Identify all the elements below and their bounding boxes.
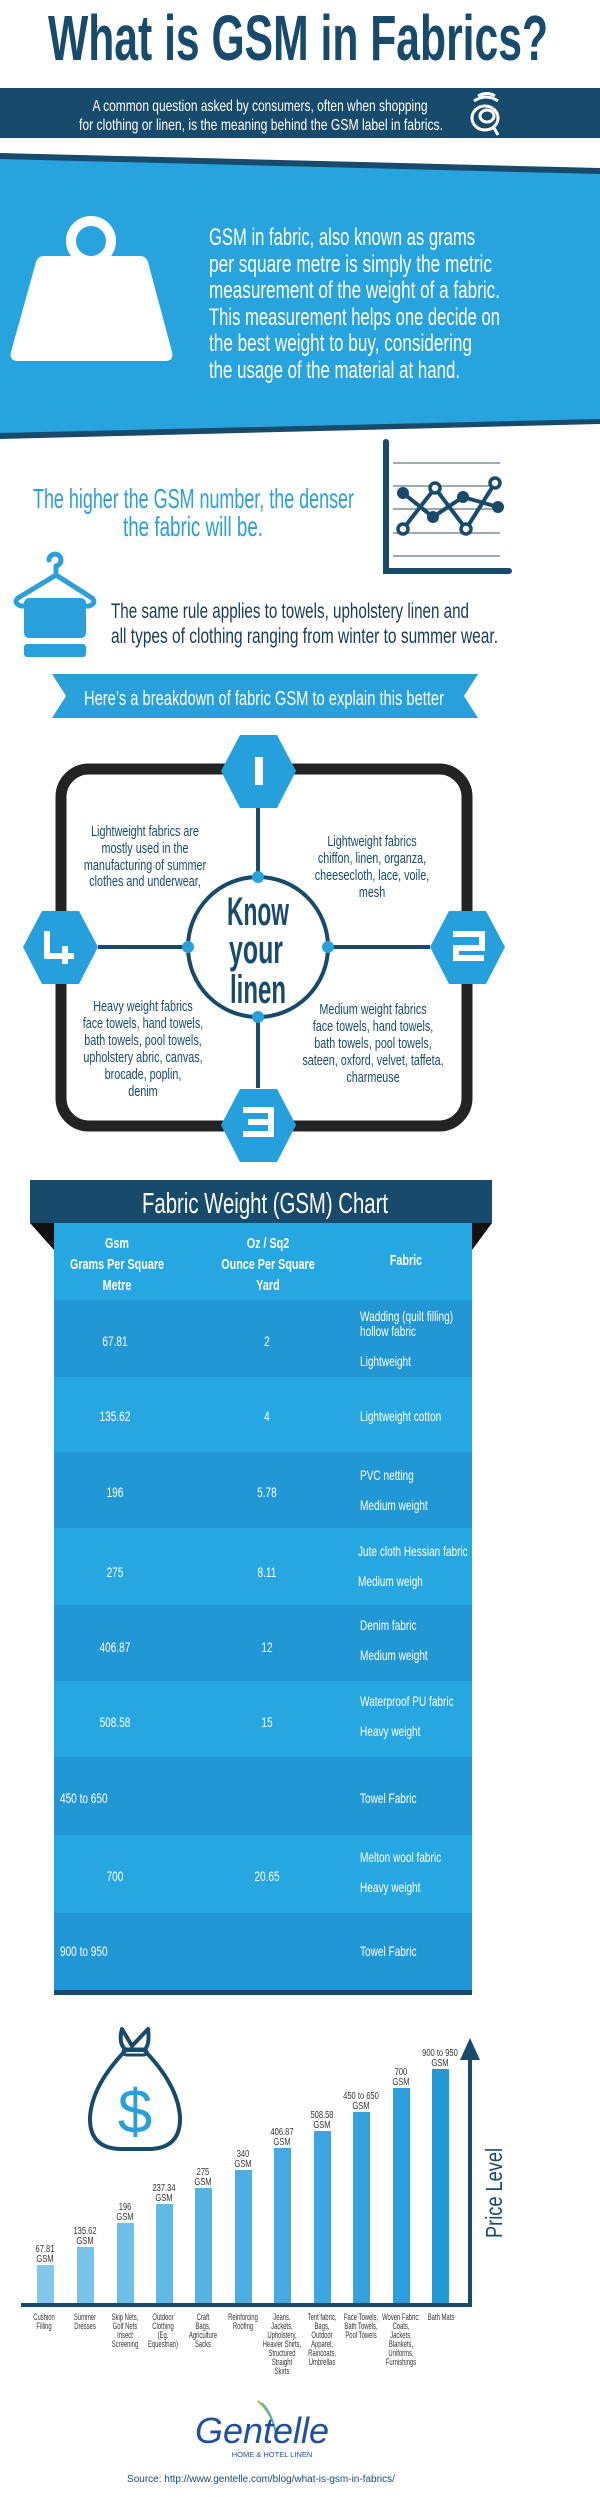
category labels: Roofing — [233, 2321, 253, 2331]
table rows: PVC netting — [360, 1467, 414, 1483]
category labels: Filling — [36, 2321, 52, 2331]
text: block 1 — [84, 822, 207, 889]
bar value labels: GSM — [76, 2235, 94, 2246]
text: block 3: Medium weight fabrics — [319, 1000, 427, 1017]
category labels: Blankets, — [389, 2339, 413, 2349]
intro band: for clothing or linen, is the meaning behind the GSM label in fabrics. — [79, 117, 443, 134]
category labels: Tent fabric, — [308, 2312, 336, 2322]
source: Source: http://www.gentelle.com/blog/what-is-gsm-in-fabrics/ — [127, 2474, 395, 2485]
center text — [227, 890, 290, 1012]
table rows: 508.58 — [100, 1714, 131, 1730]
category labels: Clothing — [152, 2321, 174, 2331]
text: block 3: sateen, oxford, velvet, taffeta, — [302, 1051, 444, 1068]
category labels: Reinforcing — [228, 2312, 258, 2322]
icon: speech swirl — [472, 94, 498, 135]
table rows: 2 — [264, 1333, 270, 1349]
panel: definition — [0, 153, 600, 439]
definition text: the usage of the material at hand. — [209, 357, 460, 384]
category labels: Raincoats, — [308, 2348, 336, 2358]
category labels: Jackets, — [271, 2321, 293, 2331]
bar value labels: 67.81 — [36, 2243, 54, 2254]
table rows: 4 — [264, 1408, 270, 1424]
category labels: Dresses — [74, 2321, 96, 2331]
table rows: Wadding (quilt filling) — [360, 1308, 453, 1324]
category labels: Bags, — [195, 2321, 211, 2331]
text: block 1: manufacturing of summer — [84, 856, 207, 873]
category labels: Jackets, — [390, 2330, 412, 2340]
table rows: Medium weight — [360, 1497, 428, 1513]
bar value labels: 900 to 950 — [422, 2047, 458, 2058]
category labels: Skirts — [275, 2366, 289, 2376]
table rows: 12 — [261, 1639, 273, 1655]
text: block 2: mesh — [359, 883, 385, 900]
bar value labels: 450 to 650 — [343, 2090, 379, 2101]
definition text: the best weight to buy, considering — [209, 330, 472, 357]
text: block 4: denim — [128, 1082, 158, 1099]
heading: denser: the fabric will be. — [123, 511, 263, 542]
bar value labels: 135.62 — [73, 2225, 97, 2236]
table rows: 700 — [107, 1868, 124, 1884]
bar value labels: GSM — [273, 2136, 291, 2147]
bar value labels: 406.87 — [270, 2126, 294, 2137]
table rows: Denim fabric — [360, 1617, 417, 1633]
bar value labels: GSM — [352, 2100, 370, 2111]
category labels: Cushion — [33, 2312, 55, 2322]
table title — [30, 1180, 492, 1223]
category labels — [33, 2312, 454, 2376]
text: block 4 — [83, 997, 203, 1099]
intro band: A common question asked by consumers, often when shopping — [92, 98, 428, 115]
bar value labels: GSM — [392, 2076, 410, 2087]
category labels: Furnishings — [386, 2357, 416, 2367]
table rows: Towel Fabric — [360, 1790, 417, 1806]
table header: Grams Per Square — [70, 1255, 164, 1272]
category labels: Golf Nets — [113, 2321, 137, 2331]
table header: Metre — [103, 1276, 131, 1293]
definition text — [209, 224, 500, 384]
text: block 2: cheesecloth, lace, voile, — [315, 866, 429, 883]
diagram: know your linen — [23, 735, 505, 1162]
bar value labels: GSM — [155, 2192, 173, 2203]
category labels: Woven Fabric: — [382, 2312, 420, 2322]
bar value labels: 340 — [237, 2148, 249, 2159]
category labels: Umbrellas — [309, 2357, 335, 2367]
bar value labels: GSM — [431, 2057, 449, 2068]
category labels: Bath Mats — [428, 2312, 454, 2322]
table header: Yard — [256, 1276, 280, 1293]
category labels: Equestrian) — [148, 2339, 178, 2349]
table rows: 450 to 650 — [60, 1790, 108, 1806]
text: block 4: upholstery abric, canvas, — [83, 1048, 203, 1065]
table: fabric weight chart — [30, 1180, 492, 1995]
category labels: Outdoor — [311, 2330, 333, 2340]
bar value labels: 196 — [119, 2201, 131, 2212]
icon: money bag: $ — [118, 2078, 152, 2147]
table rows: 275 — [107, 1564, 124, 1580]
text: block 1: mostly used in the — [102, 839, 188, 856]
category labels: Straight — [272, 2357, 293, 2367]
bar value labels: 700 — [395, 2066, 407, 2077]
ribbon banner: Here’s a breakdown of fabric GSM to explain this better — [84, 688, 444, 710]
table rows: Jute cloth Hessian fabric — [358, 1543, 468, 1559]
hex 3 — [221, 1089, 296, 1162]
category labels: Face Towels, — [344, 2312, 378, 2322]
table title: Fabric Weight (GSM) Chart — [142, 1188, 388, 1220]
table header: Ounce Per Square — [221, 1255, 315, 1272]
icon: line chart — [386, 442, 509, 571]
table rows: 5.78 — [257, 1484, 277, 1500]
heading: denser — [33, 483, 354, 542]
table header: Gsm — [105, 1234, 129, 1251]
table rows: Heavy weight — [360, 1723, 421, 1739]
text: block 3: face towels, hand towels, — [313, 1017, 433, 1034]
hex 2 — [430, 911, 505, 984]
text: block 1: Lightweight fabrics are — [91, 822, 199, 839]
bar value labels: 508.58 — [310, 2109, 334, 2120]
table rows: 406.87 — [100, 1639, 131, 1655]
text: block 4: Heavy weight fabrics — [93, 997, 193, 1014]
category labels: (Eg. — [158, 2330, 168, 2340]
table rows — [60, 1308, 468, 1959]
logo: gentelle: Gentelle — [195, 2410, 329, 2451]
table rows: hollow fabric — [360, 1323, 416, 1339]
center text: your — [229, 928, 283, 972]
text: block 2: Lightweight fabrics — [327, 832, 417, 849]
table rows: 8.11 — [258, 1564, 277, 1580]
ribbon banner — [52, 674, 478, 718]
text: block 4: face towels, hand towels, — [83, 1014, 203, 1031]
hex 1 — [221, 735, 296, 808]
table rows: 15 — [261, 1714, 273, 1730]
category labels: Apparel, — [311, 2339, 333, 2349]
table rows: 900 to 950 — [60, 1943, 108, 1959]
category labels: Skip Nets, — [112, 2312, 138, 2322]
text: block 3: charmeuse — [346, 1068, 400, 1085]
bar value labels: GSM — [194, 2176, 212, 2187]
table rows: 196 — [107, 1484, 124, 1500]
text: block 4: bath towels, pool towels, — [84, 1031, 202, 1048]
category labels: Structured — [268, 2348, 296, 2358]
bar chart: price level: Price Level — [481, 2148, 507, 2238]
table rows: Towel Fabric — [360, 1943, 417, 1959]
bar value labels: GSM — [313, 2119, 331, 2130]
table rows: Waterproof PU fabric — [360, 1693, 454, 1709]
category labels: Jeans, — [273, 2312, 291, 2322]
table rows: Melton wool fabric — [360, 1849, 441, 1865]
category labels: Bags, — [315, 2321, 330, 2331]
table header — [70, 1234, 422, 1293]
heading: denser: The higher the GSM number, the denser — [33, 483, 354, 514]
category labels: Summer — [74, 2312, 96, 2322]
table rows: 20.65 — [254, 1868, 280, 1884]
category labels: Agriculture — [189, 2330, 217, 2340]
text: same rule — [111, 600, 498, 648]
hex 4 — [23, 911, 98, 984]
bar value labels: GSM — [234, 2158, 252, 2169]
table header: Fabric — [390, 1251, 422, 1268]
bar value labels: 275 — [197, 2166, 209, 2177]
text: block 2: chiffon, linen, organza, — [318, 849, 426, 866]
bar chart: price level — [21, 2038, 507, 2376]
category labels: Sacks — [195, 2339, 211, 2349]
bar value labels: 237.34 — [152, 2182, 176, 2193]
table rows: Medium weigh — [358, 1573, 423, 1589]
category labels: Screening — [112, 2339, 138, 2349]
table rows: Medium weight — [360, 1647, 428, 1663]
category labels: Craft — [197, 2312, 210, 2322]
text: block 4: brocade, poplin, — [105, 1065, 181, 1082]
intro band — [0, 88, 600, 138]
table rows: 135.62 — [100, 1408, 131, 1424]
category labels: Insect — [117, 2330, 133, 2340]
category labels: Coats, — [393, 2321, 410, 2331]
icon: money bag — [90, 2029, 180, 2149]
definition text: GSM in fabric, also known as grams — [209, 224, 475, 251]
icon: weight — [11, 221, 172, 361]
logo: gentelle: HOME & HOTEL LINEN — [232, 2450, 312, 2459]
bar value labels: GSM — [116, 2211, 134, 2222]
table header: Oz / Sq2 — [247, 1234, 289, 1251]
center text: Know — [227, 890, 290, 934]
text: block 3: bath towels, pool towels, — [314, 1034, 432, 1051]
table rows: Lightweight cotton — [360, 1408, 441, 1424]
category labels: Bath Towels, — [344, 2321, 378, 2331]
definition text: per square metre is simply the metric — [209, 251, 492, 278]
bar value labels: GSM — [36, 2253, 54, 2264]
text: block 3 — [302, 1000, 444, 1085]
icon: hanger towel — [16, 554, 94, 657]
category labels: Uniforms, — [388, 2348, 414, 2358]
table rows: Heavy weight — [360, 1879, 421, 1895]
category labels: Upholstery, — [267, 2330, 297, 2340]
table rows: Lightweight — [360, 1353, 411, 1369]
category labels: Outdoor — [152, 2312, 174, 2322]
text: block 1: clothes and underwear, — [89, 872, 201, 889]
text: same rule: The same rule applies to towels, upholstery linen and — [111, 600, 469, 623]
center text: linen — [230, 968, 286, 1012]
table rows: 67.81 — [102, 1333, 128, 1349]
bar value labels — [36, 2047, 458, 2264]
category labels: Heavier Shirts, — [263, 2339, 301, 2349]
category labels: Pool Towels — [345, 2330, 377, 2340]
text: block 2 — [315, 832, 429, 900]
